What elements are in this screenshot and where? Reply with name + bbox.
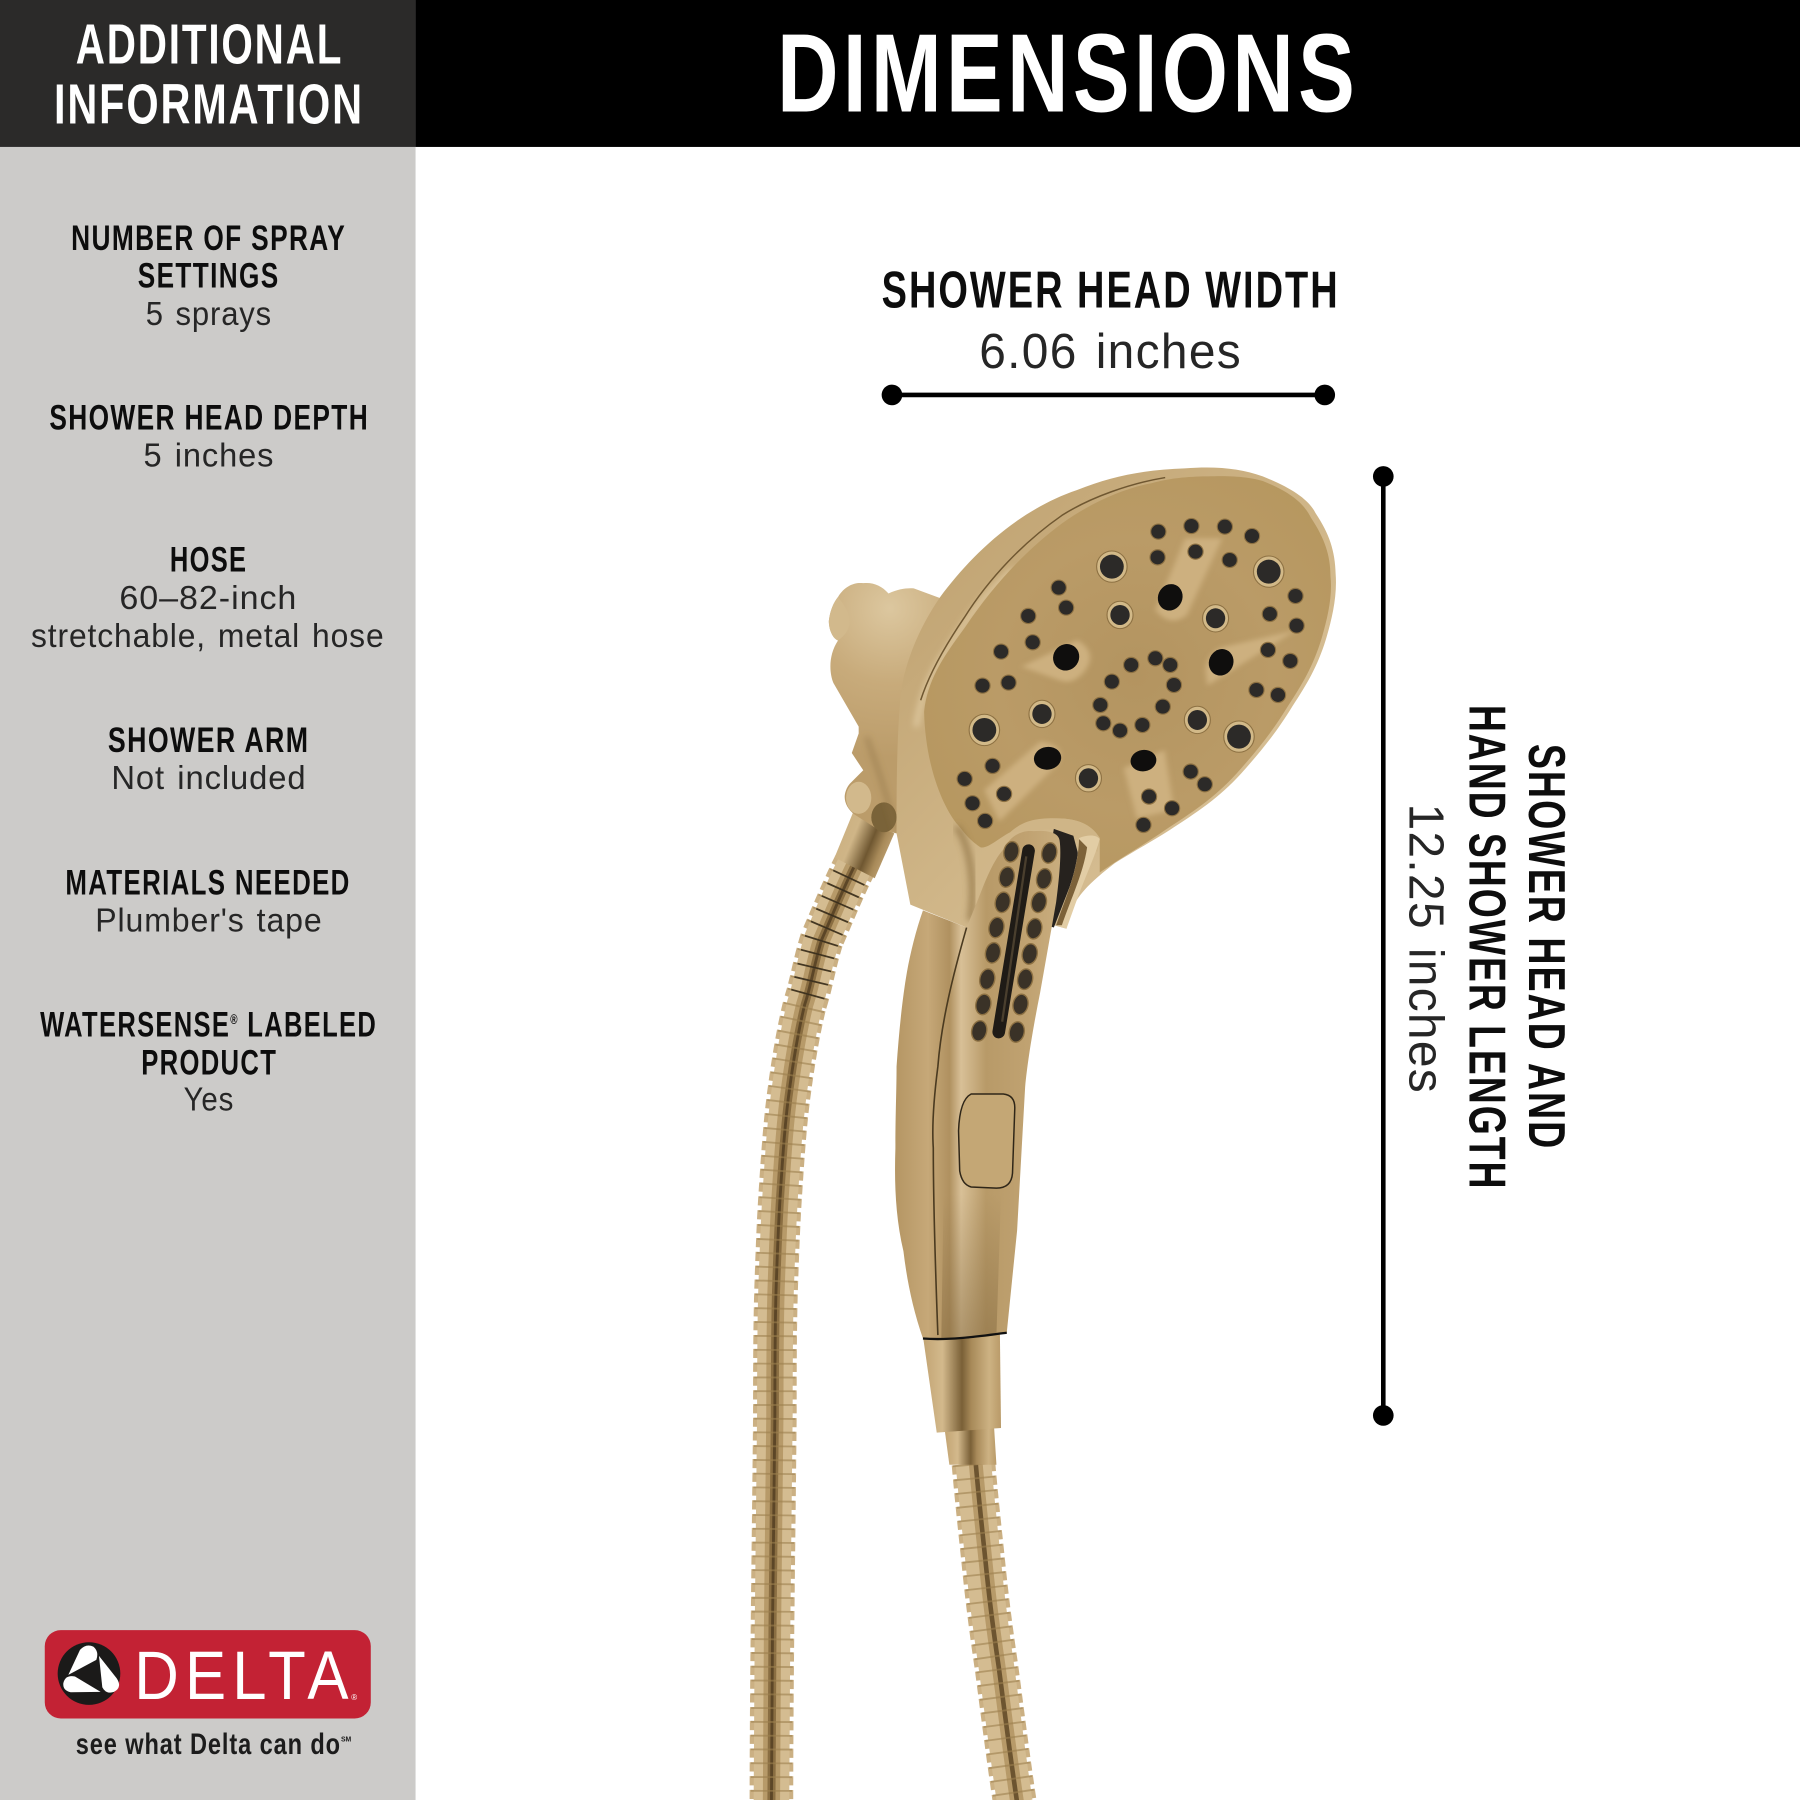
spec: shower head depth: SHOWER HEAD DEPTH — [49, 397, 369, 437]
logo: Delta: see what Delta can do — [76, 1728, 341, 1761]
length dimension line — [1373, 466, 1394, 1426]
header: additional information: INFORMATION — [54, 72, 364, 135]
title: dimensions: DIMENSIONS — [777, 10, 1359, 135]
spec: number of spray settings: SETTINGS — [138, 256, 280, 296]
head rim highlight and line — [916, 478, 1165, 727]
bracket fold — [956, 827, 972, 921]
spec: watersense labeled product: PRODUCT — [141, 1042, 277, 1082]
raised wedges — [984, 538, 1297, 822]
center ring nozzles — [1092, 650, 1182, 739]
length label: HAND SHOWER LENGTH — [1458, 705, 1516, 1190]
hose: left — [771, 864, 855, 1800]
width label: SHOWER HEAD WIDTH — [882, 261, 1340, 319]
length label: 12.25 inches — [1399, 804, 1454, 1094]
hand shower nozzles — [970, 840, 1059, 1044]
width dimension line — [882, 385, 1335, 405]
spec: shower arm: SHOWER ARM — [108, 720, 309, 760]
spec: shower arm: Not included — [111, 760, 307, 797]
spec: watersense labeled product — [40, 1005, 377, 1119]
hose tube — [835, 813, 894, 878]
lower shading — [941, 1194, 1001, 1339]
length label: SHOWER HEAD AND — [1518, 744, 1576, 1150]
spec: materials needed: Plumber's tape — [95, 903, 323, 940]
hose connector — [945, 1428, 996, 1465]
icon: Delta triangle emblem — [58, 1642, 120, 1705]
logo: Delta — [45, 1630, 371, 1761]
small nozzles — [956, 518, 1305, 833]
seam — [933, 928, 967, 1335]
title: dimensions — [416, 0, 1800, 147]
spec: shower head depth: 5 inches — [143, 438, 274, 475]
spec: watersense labeled product: ® — [230, 1012, 239, 1027]
spec: shower head depth — [49, 397, 369, 475]
spec: materials needed: MATERIALS NEEDED — [65, 862, 351, 902]
spec: hose: stretchable, metal hose — [31, 618, 385, 655]
collar — [923, 1332, 1001, 1433]
spray nozzles — [956, 518, 1305, 833]
spec: hose: HOSE — [170, 540, 247, 580]
panel: additional information sidebar — [0, 147, 416, 1800]
logo: Delta: ® — [351, 1693, 357, 1702]
spec: number of spray settings — [71, 218, 346, 333]
header: additional information: ADDITIONAL — [76, 13, 343, 76]
handle dock: dark recess and polished tip — [1010, 818, 1100, 929]
hand shower handle — [895, 831, 1060, 1339]
head shell — [897, 468, 1336, 929]
spec: number of spray settings: NUMBER OF SPRAY — [71, 218, 346, 258]
spray face slot — [999, 851, 1029, 1032]
collar seam — [923, 1333, 1007, 1339]
spec: watersense labeled product: LABELED — [239, 1005, 377, 1045]
header: additional information — [0, 0, 416, 147]
spec: shower arm — [108, 720, 309, 797]
logo: Delta: SM — [341, 1736, 352, 1743]
spec: hose: 60–82-inch — [119, 580, 297, 617]
spec: watersense labeled product: WATERSENSE — [40, 1005, 305, 1045]
spec: hose — [31, 540, 385, 655]
length label — [1399, 705, 1576, 1190]
spec: materials needed — [65, 862, 351, 940]
spec: number of spray settings: 5 sprays — [146, 296, 272, 333]
wall mount joint — [829, 583, 959, 833]
large jet openings — [1030, 582, 1236, 775]
product: shower head with hand shower and hose — [771, 468, 1336, 1800]
width label: 6.06 inches — [979, 324, 1242, 379]
logo: Delta: DELTA — [134, 1637, 355, 1714]
ringed nozzles — [969, 551, 1284, 792]
shower face — [924, 476, 1331, 872]
spec: watersense labeled product: Yes — [184, 1082, 234, 1119]
button — [959, 1094, 1015, 1188]
width label — [882, 261, 1340, 379]
hose: right — [973, 1464, 1017, 1800]
